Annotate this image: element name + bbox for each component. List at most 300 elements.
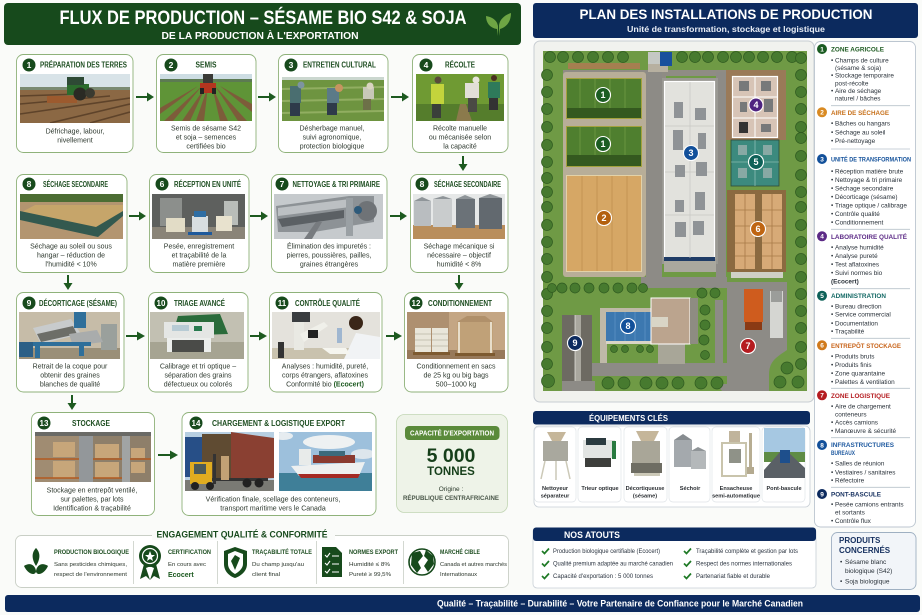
description: Calibrage et tri optique – [160,364,236,370]
legend 7: • [831,428,833,435]
step title: TRIAGE AVANCÉ [174,299,226,308]
products list: • [840,559,843,566]
zone 5: administration [731,140,779,186]
strengths: left column [542,548,673,580]
description: Pesée, enregistrement [164,244,234,250]
origin: RÉPUBLIQUE CENTRAFRICAINE [403,493,500,502]
legend 1: • [831,88,833,95]
legend 8: Salles de réunion [835,461,885,468]
icon: certification rosette [139,545,161,580]
legend 5: • [831,329,833,336]
step title: SEMIS [196,60,217,70]
footer banner: Qualité – Traçabilité – Durabilité – Votre Partenaire de Confiance pour le Marché Canadien [437,598,803,608]
legend 6: Produits finis [835,362,872,369]
legend 3: Décorticage (sésame) [835,194,898,201]
photo: tarpaulin drying area [20,194,123,239]
description: et soja – semences [176,134,237,142]
step title: SÉCHAGE SECONDAIRE [43,180,108,189]
item: target market [440,547,507,578]
number badge: 8 [420,179,425,189]
products list: Sésame blanc [845,559,887,566]
legend 2: Pré-nettoyage [835,138,876,145]
item: certification [168,549,211,579]
item: full traceability: client final [252,572,280,578]
legend 9: Contrôle flux [835,518,872,525]
legend 7: 7 [820,393,824,400]
strengths: right column: Traçabilité complète et gestion par lots [696,549,798,555]
step 14 card [182,412,376,516]
legend 5: Documentation [835,320,878,327]
top parking strip [568,63,640,69]
step title: RÉCOLTE [445,60,476,70]
products list: biologique (S42) [845,568,892,575]
roads [562,62,787,391]
zone 1 markers [596,88,610,152]
products heading: PRODUITS [839,536,881,545]
legend 7: Manœuvre & sécurité [835,428,897,435]
description: nivellement [57,138,93,144]
item: export standards: NORMES EXPORT [349,549,398,556]
zone 4: quality lab [726,70,786,140]
description: Conformité bio (Ecocert) [286,382,364,388]
legend 4: • [831,270,833,277]
equipment: bagging machine [712,427,760,502]
number badge: 14 [192,419,201,428]
legend 3: • [831,219,833,226]
zone 5 marker: 5 [753,157,759,167]
products list: • [840,578,843,585]
description: Conditionnement en sacs [416,364,496,370]
description: Récolte manuelle [433,126,487,132]
legend 7: ZONE LOGISTIQUE [831,393,891,400]
legend 8: • [831,478,833,485]
arrows: row 2 [64,212,464,290]
icon: sprout [486,13,511,36]
legend 9: Pesée camions entrants [835,501,904,508]
photo: container and forklift [185,432,274,491]
zone 6 marker: 6 [755,224,761,234]
delivery truck [648,52,672,66]
zone 4 marker: 4 [753,100,759,110]
equipment: weighbridge [762,427,805,502]
description: transport maritime vers le Canada [220,506,326,512]
equipment header: ÉQUIPEMENTS CLÉS [589,414,669,423]
description: Retrait de la coque pour [33,364,108,370]
photo: hulling machine [19,312,120,359]
icon: globe [409,549,435,575]
step 11 card [270,292,382,392]
legend 4: (Ecocert) [831,278,859,285]
photo: seeded rows [160,74,252,121]
item: organic production: PRODUCTION BIOLOGIQUE [54,549,130,556]
footer banner [5,595,920,612]
legend 5: 5 [820,293,824,300]
plan subtitle: Unité de transformation, stockage et logistique [627,24,825,34]
zone 3 marker [684,146,698,160]
description: la capacité [443,144,477,150]
legend 6: • [831,354,833,361]
zone 9 marker: 9 [572,338,578,348]
capacity value [427,445,476,478]
item: full traceability [252,547,313,578]
equipment: optical sorter [578,427,621,502]
legend 1: post-récolte [835,80,869,87]
legend 2: Bâches ou hangars [835,121,890,128]
photo: tractor tilling [20,74,130,123]
legend 2: • [831,138,833,145]
step title: CHARGEMENT & LOGISTIQUE EXPORT [212,419,345,428]
legend 9: et sortants [835,510,865,517]
legend 1: naturel / bâches [835,96,880,103]
legend 3: Séchage secondaire [835,185,894,192]
description: corps étrangers, aflatoxines [282,372,368,380]
legend 6: ENTREPÔT STOCKAGE [831,341,902,350]
item: organic production: Sans pesticides chimiques, [54,562,127,568]
description: défectueux ou colorés [164,382,233,388]
description: certifiées bio [186,144,226,150]
icon: export checklist [322,547,342,577]
legend 1: (sésame & soja) [835,65,881,72]
legend 8: • [831,461,833,468]
item: full traceability: Du champ jusqu'au [252,562,304,568]
legend 1: • [831,57,833,64]
step 12 card [404,292,508,392]
legend 8: INFRASTRUCTURES [831,442,895,449]
legend 4: Test aflatoxines [835,261,879,268]
legend 2 [817,107,890,145]
icon: organic sprout [24,548,48,574]
icon: traceability shield [224,547,247,578]
description: suivi agronomique, [303,134,361,142]
legend 6: 6 [820,343,824,350]
step title: DÉCORTICAGE (SÉSAME) [39,299,117,308]
origin: Origine : [439,486,463,493]
step 1 card [16,54,133,152]
legend 9 [817,489,904,525]
zone 8: offices [600,298,698,363]
legend 7: Aire de chargement [835,403,891,410]
products heading: CONCERNÉS [839,546,891,555]
strengths: right column: Partenariat fiable et durable [696,574,771,580]
legend 9: PONT-BASCULE [831,492,882,498]
description: graines étrangères [300,262,359,268]
step 13 card [32,412,154,516]
legend 3 [817,154,911,226]
photo: optical sorter [150,312,244,359]
zone 9: weighbridge [562,315,592,381]
legend 3: • [831,202,833,209]
arrows: row 1 [136,92,468,171]
zone 3 marker: 3 [688,148,694,158]
legend 3: Triage optique / calibrage [835,202,907,209]
number badge: 13 [40,419,49,428]
legend 3: • [831,168,833,175]
description: nécessaire – objectif [427,252,491,260]
description: Identification & traçabilité [53,506,131,512]
legend 3: Réception matière brute [835,168,904,175]
products list: Soja biologique [845,578,890,585]
description: Analyses : humidité, pureté, [282,364,368,370]
description: Séchage mécanique si [424,244,495,250]
photo: warehouse racks [35,432,151,482]
legend 2: AIRE DE SÉCHAGE [831,108,890,117]
step 4 card [412,54,508,152]
equipment: dryer [669,427,710,502]
legend 8: • [831,469,833,476]
strengths header [533,528,816,541]
legend 2: Séchage au soleil [835,129,885,136]
panel: site plan [534,41,814,402]
commitment heading: ENGAGEMENT QUALITÉ & CONFORMITÉ [156,530,328,540]
step 3 card [278,54,388,152]
number badge: 12 [412,299,421,308]
item: full traceability: TRAÇABILITÉ TOTALE [252,547,313,556]
legend 6: Zone quarantaine [835,371,886,378]
photo: silos [413,194,505,239]
description: l'humidité < 10% [45,262,97,268]
strengths header: NOS ATOUTS [564,530,620,540]
description: Élimination des impuretés : [287,242,371,250]
equipment: huller: (sésame) [633,493,657,499]
item: certification: En cours avec [168,562,206,568]
description: protection biologique [300,144,364,150]
step title: SÉCHAGE SECONDAIRE [434,180,501,189]
legend 5: Bureau direction [835,303,882,310]
description: sur palettes, par lots [60,496,124,504]
legend 8: Réfectoire [835,478,865,485]
legend 7: Accès camions [835,420,878,427]
panel: products concerned [832,532,916,590]
legend 4: Analyse humidité [835,244,884,251]
legend 1 [817,44,894,103]
strengths: right column: Respect des normes internationales [696,562,792,568]
zone 7: logistics [740,289,783,354]
description: 500–1000 kg [436,382,476,388]
number badge: 10 [157,299,166,308]
panel: quality commitment [16,530,508,588]
strengths: left column: Capacité d'exportation : 5 000 tonnes [553,574,653,580]
legend 5: ADMINISTRATION [831,293,886,300]
number badge: 3 [289,60,294,70]
step 7 card [272,174,387,272]
legend 1: ZONE AGRICOLE [831,46,885,54]
equipment: weighbridge: Pont-bascule [766,486,802,492]
equipment: cleaner-separator: séparateur [541,493,570,499]
equipment: huller: Décortiqueuse [626,486,664,492]
description: Vérification finale, scellage des conteneurs, [206,496,340,504]
legend 8: Vestiaires / sanitaires [835,469,895,476]
panel: legend [814,42,916,527]
item: certification: CERTIFICATION [168,549,211,556]
legend 6: • [831,371,833,378]
description: blanches de qualité [40,382,100,388]
legend 1: Champs de culture [835,57,889,64]
photo: weeding crew [282,77,384,121]
arrows: row 3 [68,332,402,410]
plan title: PLAN DES INSTALLATIONS DE PRODUCTION [580,6,872,22]
item: target market: MARCHÉ CIBLE [440,547,481,556]
zone 7 marker: 7 [745,341,751,351]
step 8 card: sun drying [16,174,127,272]
step 10 card [148,292,248,392]
legend 3: Nettoyage & tri primaire [835,177,903,184]
arrow: storage to loading [158,450,178,460]
legend 7: conteneurs [835,411,867,418]
item: organic production: respect de l'environnement [54,572,127,578]
description: Stockage en entrepôt ventilé, [47,488,137,494]
step 6 card [150,174,249,272]
item: export standards: Humidité ≤ 8% [349,562,390,568]
legend 5: Service commercial [835,312,891,319]
legend 3: • [831,177,833,184]
number badge: 8 [27,179,32,189]
legend 6 [817,340,902,386]
legend 6: Palettes & ventilation [835,379,895,386]
zone 2 marker: 2 [601,213,607,223]
legend 6: Produits bruts [835,354,874,361]
subtitle: DE LA PRODUCTION À L'EXPORTATION [162,29,358,42]
legend 1: • [831,73,833,80]
photo: bags and big bag [407,312,505,359]
photo: reception warehouse [152,194,245,239]
equipment: huller [624,427,667,502]
step title: ENTRETIEN CULTURAL [303,60,376,70]
panel: our strengths [533,528,816,588]
legend 1: Aire de séchage [835,88,882,95]
step title: STOCKAGE [72,419,111,428]
legend 7: • [831,403,833,410]
step title: RÉCEPTION EN UNITÉ [174,180,242,189]
description: séparation des grains [165,372,232,380]
number badge: 2 [169,60,174,70]
equipment: bagging machine: Ensacheuse [720,486,752,492]
description: Semis de sésame S42 [171,126,241,132]
capacity value: TONNES [427,466,475,478]
equipment: dryer: Séchoir [680,486,701,492]
zone 8 marker: 8 [625,321,631,331]
zone 1 markers: 1 [600,90,606,100]
legend 7 [817,390,897,435]
capacity value: 5 000 [427,445,476,467]
strengths: left column: Production biologique certifiable (Ecocert) [553,549,660,555]
legend 7: • [831,420,833,427]
step title: CONTRÔLE QUALITÉ [295,299,361,308]
legend 5: • [831,320,833,327]
legend 6: • [831,362,833,369]
description: humidité < 8% [437,262,481,268]
description: Séchage au soleil ou sous [30,244,112,250]
description: pierres, poussières, pailles, [287,252,371,260]
number badge: 1 [27,60,32,70]
strengths: left column: Qualité premium adaptée au marché canadien [553,562,673,568]
item: target market: Canada et autres marchés [440,562,507,568]
step 8 card: mechanical drying [410,174,508,272]
panel: export capacity [396,414,508,512]
item: export standards: Pureté ≥ 99,5% [349,572,391,578]
legend 2: • [831,121,833,128]
legend 4: • [831,253,833,260]
legend 3: 3 [820,156,824,163]
legend 4 [817,231,908,285]
legend 3: Contrôle qualité [835,211,880,218]
legend 3: • [831,211,833,218]
legend 9: • [831,501,833,508]
step title: NETTOYAGE & TRI PRIMAIRE [292,180,381,189]
title: FLUX DE PRODUCTION – SÉSAME BIO S42 & SOJA [60,7,467,29]
number badge: 11 [278,299,287,308]
photo: cleaning machine [274,194,383,239]
legend 4: LABORATOIRE QUALITÉ [831,232,908,241]
item: organic production [54,549,130,578]
description: obtenir des graines [40,372,100,380]
number badge [190,416,202,430]
description: de 25 kg ou big bags [424,372,489,380]
origin [403,486,500,502]
legend 4: • [831,244,833,251]
equipment: cleaner-separator [534,427,576,502]
header: production flow [4,3,521,45]
legend 3: Conditionnement [835,219,884,226]
legend 9: • [831,518,833,525]
item: certification: Ecocert [168,572,194,579]
legend 3: • [831,194,833,201]
equipment: cleaner-separator: Nettoyeur [542,486,569,492]
capacity badge: CAPACITÉ D'EXPORTATION [410,428,494,438]
trees [542,52,806,389]
description: Défrichage, labour, [46,128,104,136]
legend 4: Analyse pureté [835,253,878,260]
item: target market: Internationaux [440,572,477,578]
legend 6: • [831,379,833,386]
step 2 card [156,54,256,152]
photo: manual harvest [416,74,504,121]
legend 5: • [831,312,833,319]
zone 6: warehouse [727,190,786,278]
legend 3: • [831,185,833,192]
photo: quality lab [272,312,380,359]
equipment header [533,411,810,424]
zone 2: drying area [566,176,642,272]
legend 8: BUREAUX [831,450,855,457]
strengths: right column [684,548,798,580]
legend 1: Stockage temporaire [835,73,894,80]
legend 4: Suivi normes bio [835,270,883,277]
legend 9: 9 [820,491,824,498]
legend 5 [817,291,891,336]
step title: CONDITIONNEMENT [428,299,492,308]
legend 4: • [831,261,833,268]
number badge: 9 [27,298,32,308]
number badge: 7 [280,179,285,189]
legend 8: 8 [820,442,824,449]
zone 3: processing unit [662,78,718,272]
header: facility plan [533,3,918,38]
legend 2: • [831,129,833,136]
number badge: 6 [160,179,165,189]
legend 4: 4 [820,234,824,241]
description: matière première [173,262,226,268]
equipment: bagging machine: semi-automatique [712,493,760,499]
equipment: optical sorter: Trieur optique [581,486,619,492]
legend 1: 1 [820,46,824,53]
photo: container ship [279,432,372,491]
item: export standards [349,549,398,578]
legend 5: • [831,303,833,310]
description: Désherbage manuel, [300,126,365,132]
legend 8 [817,440,895,485]
description: et traçabilité de la [172,252,227,260]
zone 1 markers: 1 [600,139,606,149]
